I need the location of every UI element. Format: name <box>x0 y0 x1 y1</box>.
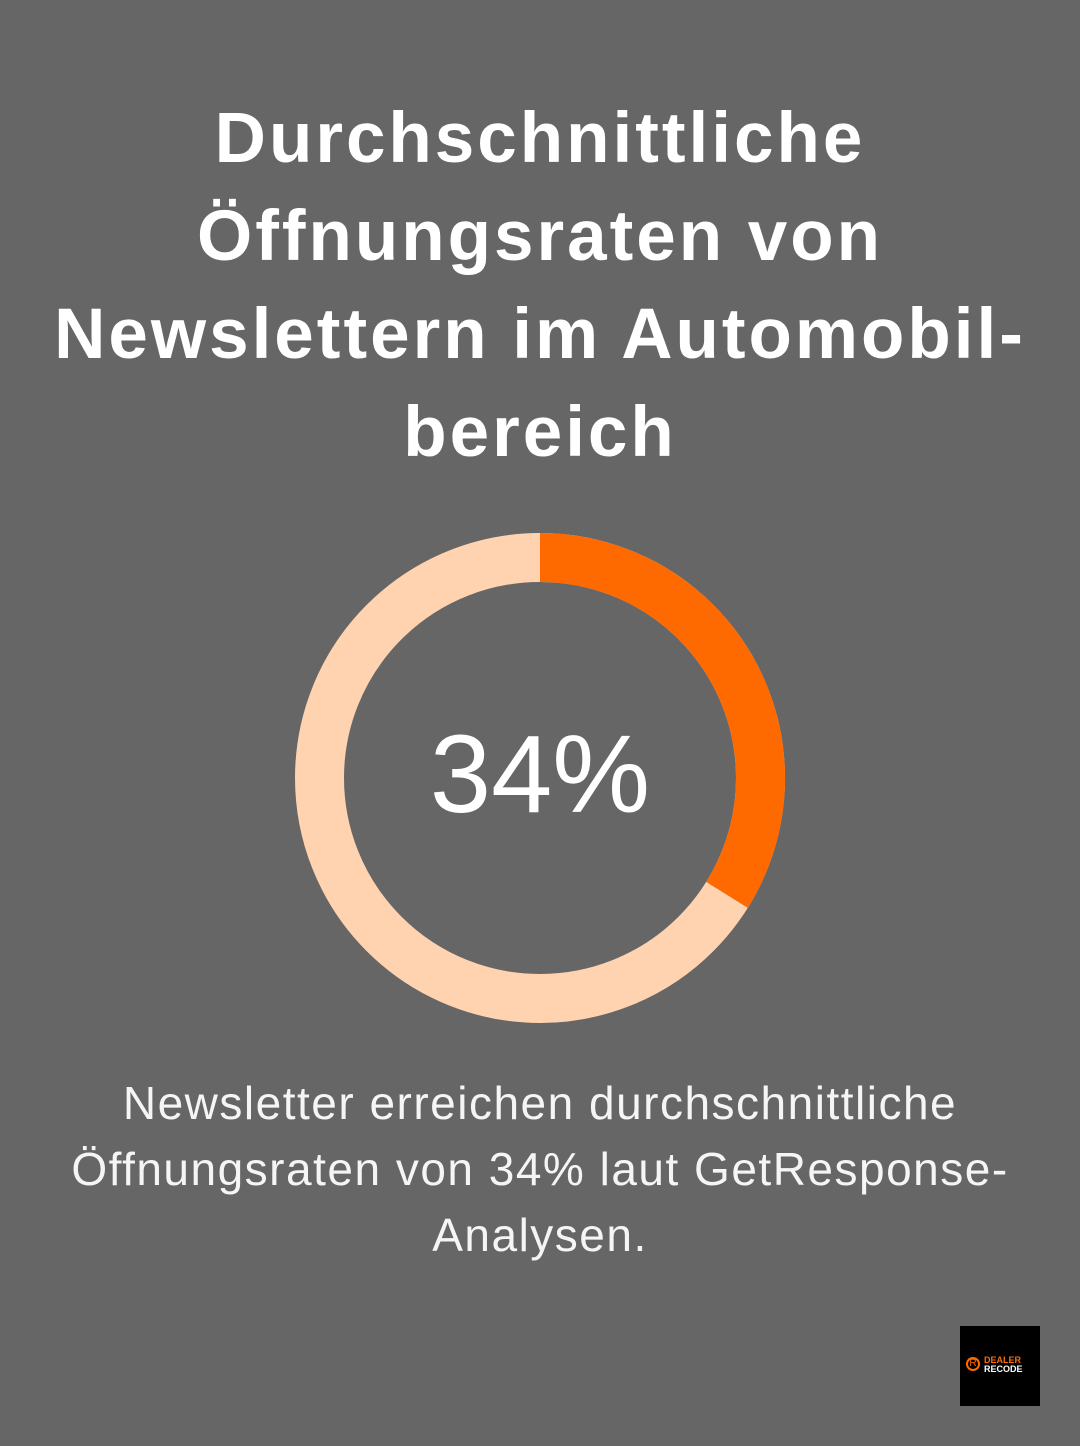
title <box>54 99 1026 472</box>
description text <box>71 1077 1009 1261</box>
description text: Newsletter erreichen durchschnittliche <box>123 1077 957 1129</box>
logo <box>960 1326 1040 1406</box>
title: Durchschnittliche <box>215 99 865 178</box>
logo: DEALER <box>984 1355 1021 1365</box>
donut chart: 34% <box>430 713 650 836</box>
title: Öffnungsraten von <box>197 197 883 276</box>
title: bereich <box>403 393 677 472</box>
logo: RECODE <box>984 1364 1023 1374</box>
description text: Analysen. <box>432 1209 648 1261</box>
title: Newslettern im Automobil- <box>54 295 1026 374</box>
description text: Öffnungsraten von 34% laut GetResponse- <box>71 1143 1009 1195</box>
logo: R <box>969 1358 977 1369</box>
